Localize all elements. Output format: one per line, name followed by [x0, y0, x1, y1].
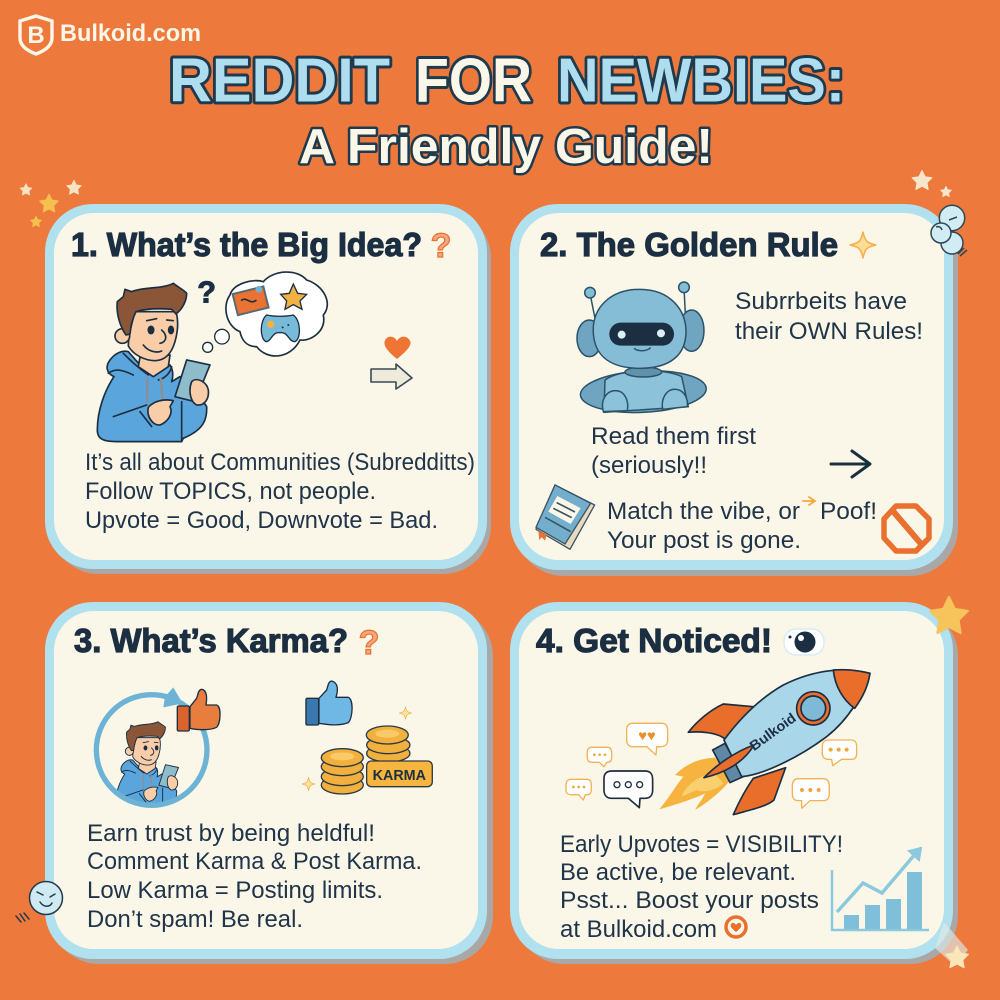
panel 3 body text: [87, 820, 422, 933]
panel 1 body text: [85, 449, 475, 534]
icon: orange question mark: ?: [359, 624, 379, 662]
logo: Bulkoid shield and wordmark: Bulkoid.com: [60, 20, 201, 47]
icon: karma coins: [321, 726, 432, 794]
logo: Bulkoid shield and wordmark: [20, 16, 201, 54]
icon: eye: [784, 629, 824, 655]
panel 2 heading: 2. The Golden Rule: [540, 226, 838, 263]
panel 2 card frame: [510, 204, 958, 576]
panel 2 text: subreddits rules: their OWN Rules!: [735, 318, 923, 345]
panel 4 body text: [560, 831, 843, 943]
decoration: stars top right: [912, 171, 952, 197]
illustration: person with phone and thought cloud: [97, 272, 327, 442]
panel 2 text: read them first: Read them first: [591, 423, 756, 450]
icon: blue thumbs up: [306, 681, 352, 725]
panel 1 body text: Follow TOPICS, not people.: [85, 478, 376, 505]
panel 3 body text: Low Karma = Posting limits.: [87, 877, 383, 904]
decoration: light stars on panel 4 bottom corner: [935, 922, 968, 968]
icon: orange question mark: ?: [431, 227, 451, 265]
panel 3: What's Karma: [16, 602, 493, 964]
panel 3 heading: 3. What’s Karma?: [74, 622, 348, 659]
panel 2 text: subreddits rules: [735, 288, 923, 345]
title: NEWBIES:: [557, 46, 845, 116]
panel 2 text: match the vibe: Poof!: [820, 498, 877, 525]
decorative smiley: [16, 882, 62, 922]
panel 1 card frame: [45, 204, 491, 574]
panel 4 body text: Be active, be relevant.: [560, 859, 796, 886]
title: REDDIT: [169, 46, 390, 116]
panel 3 body text: Comment Karma & Post Karma.: [87, 848, 422, 875]
panel 2 text: match the vibe: Match the vibe, or: [607, 498, 800, 525]
subtitle: A Friendly Guide!: [299, 120, 713, 174]
panel 2 text: read them first: (seriously!!: [591, 452, 707, 479]
arrow: [831, 451, 870, 477]
speech bubbles: [566, 723, 857, 808]
logo: Bulkoid shield and wordmark: B: [27, 22, 45, 49]
decoration: gold star on panel 4 corner: [930, 597, 968, 633]
icon: no sign: [884, 506, 929, 551]
illustration: rocket: [659, 670, 870, 815]
panel 4 body text: at Bulkoid.com: [560, 916, 717, 943]
illustration: rocket: Bulkoid: [746, 709, 799, 754]
panel 4 body text: Psst... Boost your posts: [560, 887, 819, 914]
chart: growth bars with arrow: [832, 848, 929, 930]
icon: heart: [384, 337, 411, 359]
panel 1 heading: 1. What’s the Big Idea?: [71, 226, 422, 263]
title: FOR: [415, 46, 532, 116]
panel 3 body text: Earn trust by being heldful!: [87, 820, 375, 847]
panel 1 body text: It’s all about Communities (Subredditts): [85, 449, 475, 476]
panel 2 text: match the vibe: Your post is gone.: [607, 527, 801, 554]
icon: small orange arrow: [803, 497, 815, 505]
decoration: bubble faces at panel 2 corner: [931, 205, 967, 256]
icon: outline arrow: [371, 364, 412, 389]
panel 4 card frame: [510, 602, 958, 964]
panel 2 text: match the vibe: [607, 498, 877, 554]
panel 2: The Golden Rule: [510, 204, 958, 576]
panel 2 text: read them first: [591, 423, 756, 479]
speech bubbles: ♥♥: [638, 729, 656, 745]
panel 3 body text: Don’t spam! Be real.: [87, 906, 303, 933]
icon: heart badge: [726, 917, 746, 937]
panel 4: Get Noticed: [510, 602, 958, 964]
decorative stars top left: [20, 180, 81, 227]
title: [169, 46, 845, 116]
illustration: person with phone and thought cloud: ?: [197, 276, 216, 310]
panel 4 heading: 4. Get Noticed!: [536, 622, 772, 659]
panel 1: What's the Big Idea: [45, 204, 491, 574]
icon: sparkle: [850, 232, 876, 258]
illustration: person in circular arrow with thumbs up: [96, 687, 220, 810]
panel 2 text: subreddits rules: Subrrbeits have: [735, 288, 907, 315]
icons: gold sparkles: [302, 707, 412, 791]
panel 3 card frame: [45, 602, 493, 964]
icon: karma coins: KARMA: [373, 768, 426, 784]
panel 4 body text: Early Upvotes = VISIBILITY!: [560, 831, 843, 858]
panel 1 body text: Upvote = Good, Downvote = Bad.: [85, 507, 438, 534]
icon: book: [536, 485, 595, 549]
illustration: robot: [577, 282, 707, 416]
